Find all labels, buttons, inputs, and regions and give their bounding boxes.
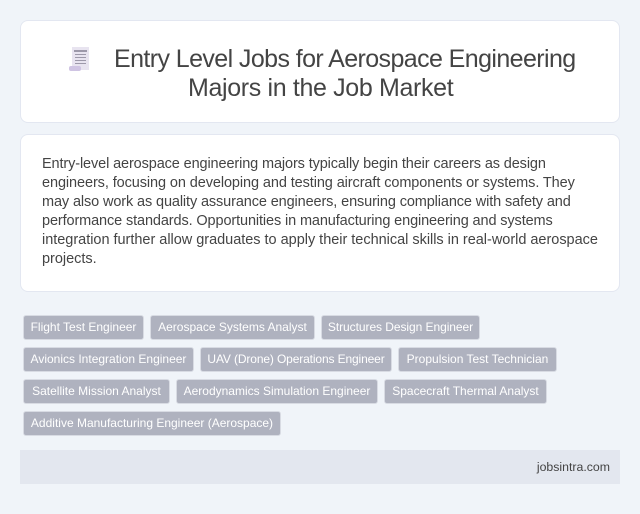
footer bar [20, 450, 620, 484]
description text: performance standards. Opportunities in manufacturing engineering and systems [42, 213, 553, 229]
icon: document scroll [69, 47, 89, 71]
panel: description card [20, 134, 620, 292]
description text: may also work as quality assurance engineers, ensuring compliance with safety and [42, 194, 571, 210]
title [114, 45, 576, 102]
footer source: jobsintra.com [537, 460, 610, 474]
tag: Additive Manufacturing Engineer (Aerospace) [31, 416, 273, 430]
title: Majors in the Job Market [188, 74, 453, 102]
tag [398, 347, 557, 372]
panel: title card [20, 20, 620, 123]
tag [23, 379, 170, 404]
tag [23, 411, 281, 436]
tag: Aerospace Systems Analyst [158, 320, 307, 334]
tag: Spacecraft Thermal Analyst [392, 384, 539, 398]
tag: Propulsion Test Technician [407, 352, 548, 366]
description text: engineers, focusing on developing and testing aircraft components or systems. They [42, 175, 575, 191]
description text [42, 156, 598, 267]
tag [23, 347, 194, 372]
description text: integration further allow graduates to apply their technical skills in real-world aerospace [42, 232, 598, 248]
tag [200, 347, 392, 372]
tag: Avionics Integration Engineer [31, 352, 186, 366]
description text: projects. [42, 251, 97, 267]
tag: Flight Test Engineer [31, 320, 136, 334]
job tags [23, 315, 557, 436]
tag: Satellite Mission Analyst [32, 384, 161, 398]
tag: Aerodynamics Simulation Engineer [184, 384, 370, 398]
tag [321, 315, 480, 340]
title: Entry Level Jobs for Aerospace Engineering [114, 45, 576, 73]
tag: UAV (Drone) Operations Engineer [207, 352, 385, 366]
tag [23, 315, 144, 340]
tag [176, 379, 378, 404]
tag: Structures Design Engineer [328, 320, 473, 334]
tag [384, 379, 547, 404]
description text: Entry-level aerospace engineering majors typically begin their careers as design [42, 156, 546, 172]
tag [150, 315, 315, 340]
